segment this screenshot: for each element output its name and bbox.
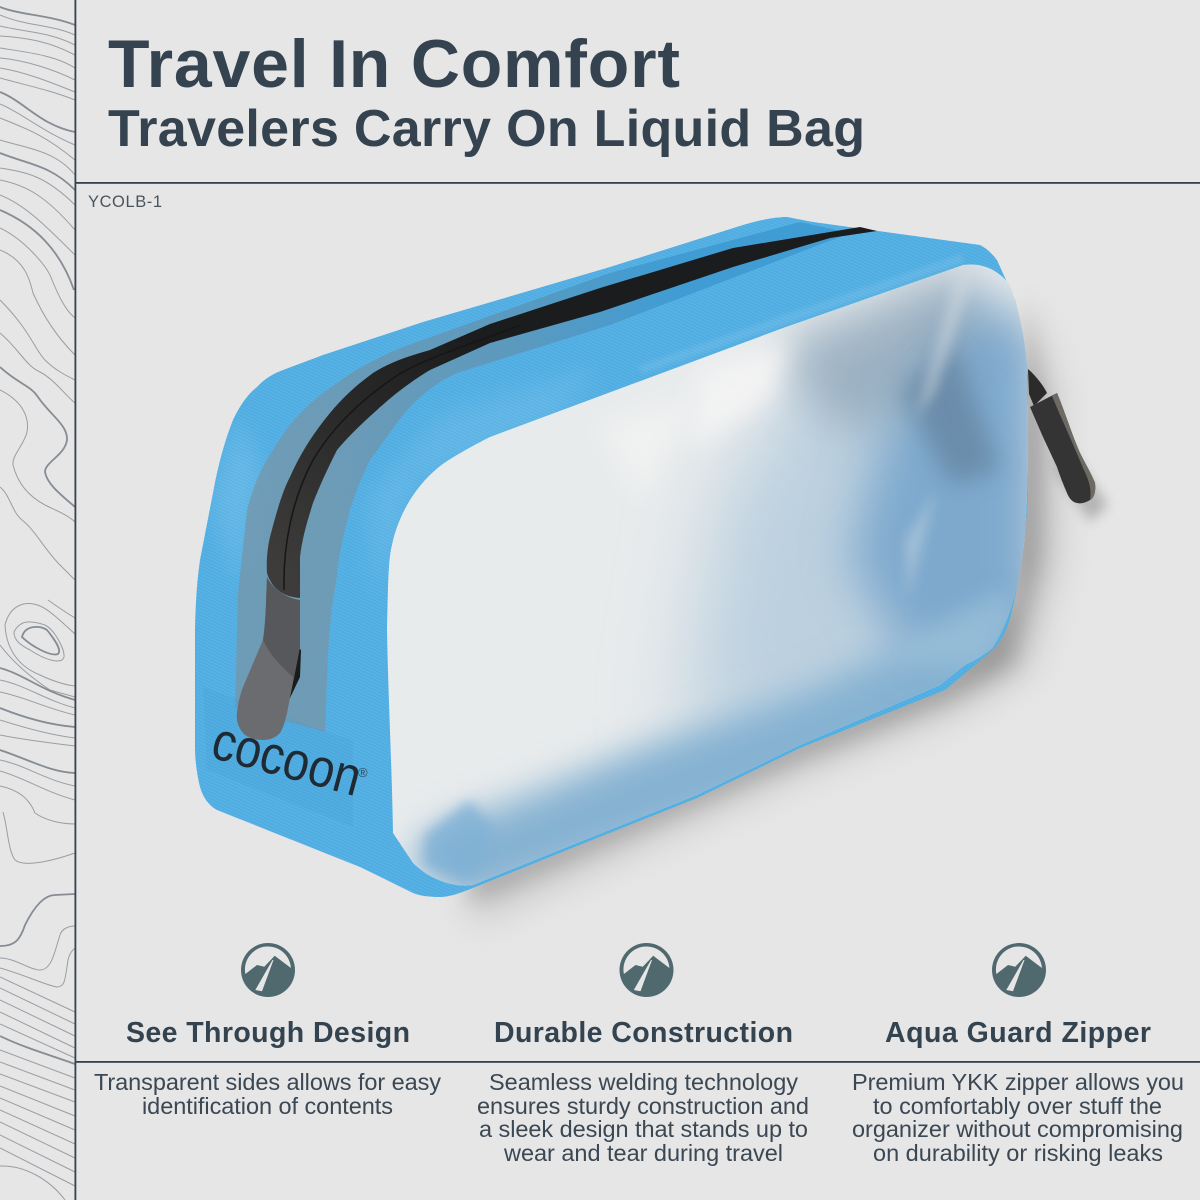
description: identification of contents — [142, 1093, 393, 1119]
heading: Durable Construction — [494, 1017, 793, 1049]
welded seam strip — [235, 222, 850, 732]
waterproof zipper — [267, 227, 877, 598]
description — [852, 1069, 1184, 1166]
brand logo: ® — [358, 765, 368, 780]
feature: see through design — [94, 943, 441, 1119]
bag body — [190, 210, 1035, 905]
description: a sleek design that stands up to — [479, 1116, 808, 1142]
product code: YCOLB-1 — [88, 193, 162, 211]
icon: mountain badge — [620, 943, 674, 997]
description: wear and tear during travel — [503, 1140, 783, 1166]
description: ensures sturdy construction and — [477, 1093, 809, 1119]
description: on durability or risking leaks — [873, 1140, 1163, 1166]
zipper puller right — [1028, 369, 1095, 503]
transparent window — [380, 250, 1040, 905]
description: Premium YKK zipper allows you — [852, 1069, 1184, 1095]
description: Seamless welding technology — [489, 1069, 798, 1095]
icon: mountain badge — [992, 943, 1046, 997]
logo patch — [203, 687, 353, 827]
description: Transparent sides allows for easy — [94, 1069, 441, 1095]
bag shadow — [470, 300, 1108, 925]
description — [477, 1069, 809, 1166]
title: Travel In Comfort — [108, 26, 680, 102]
zipper pull tab — [237, 577, 301, 740]
icon: mountain badge — [241, 943, 295, 997]
product: transparent blue liquid bag — [190, 210, 1108, 925]
heading: See Through Design — [126, 1017, 410, 1049]
subtitle: Travelers Carry On Liquid Bag — [108, 100, 865, 158]
description: to comfortably over stuff the — [873, 1093, 1162, 1119]
heading: Aqua Guard Zipper — [885, 1017, 1151, 1049]
description — [94, 1069, 441, 1119]
brand logo: cocoon — [206, 710, 368, 808]
feature: durable construction — [477, 943, 809, 1166]
description: organizer without compromising — [852, 1116, 1183, 1142]
topographic contour strip — [0, 7, 75, 1200]
feature: aqua guard zipper — [852, 943, 1184, 1166]
